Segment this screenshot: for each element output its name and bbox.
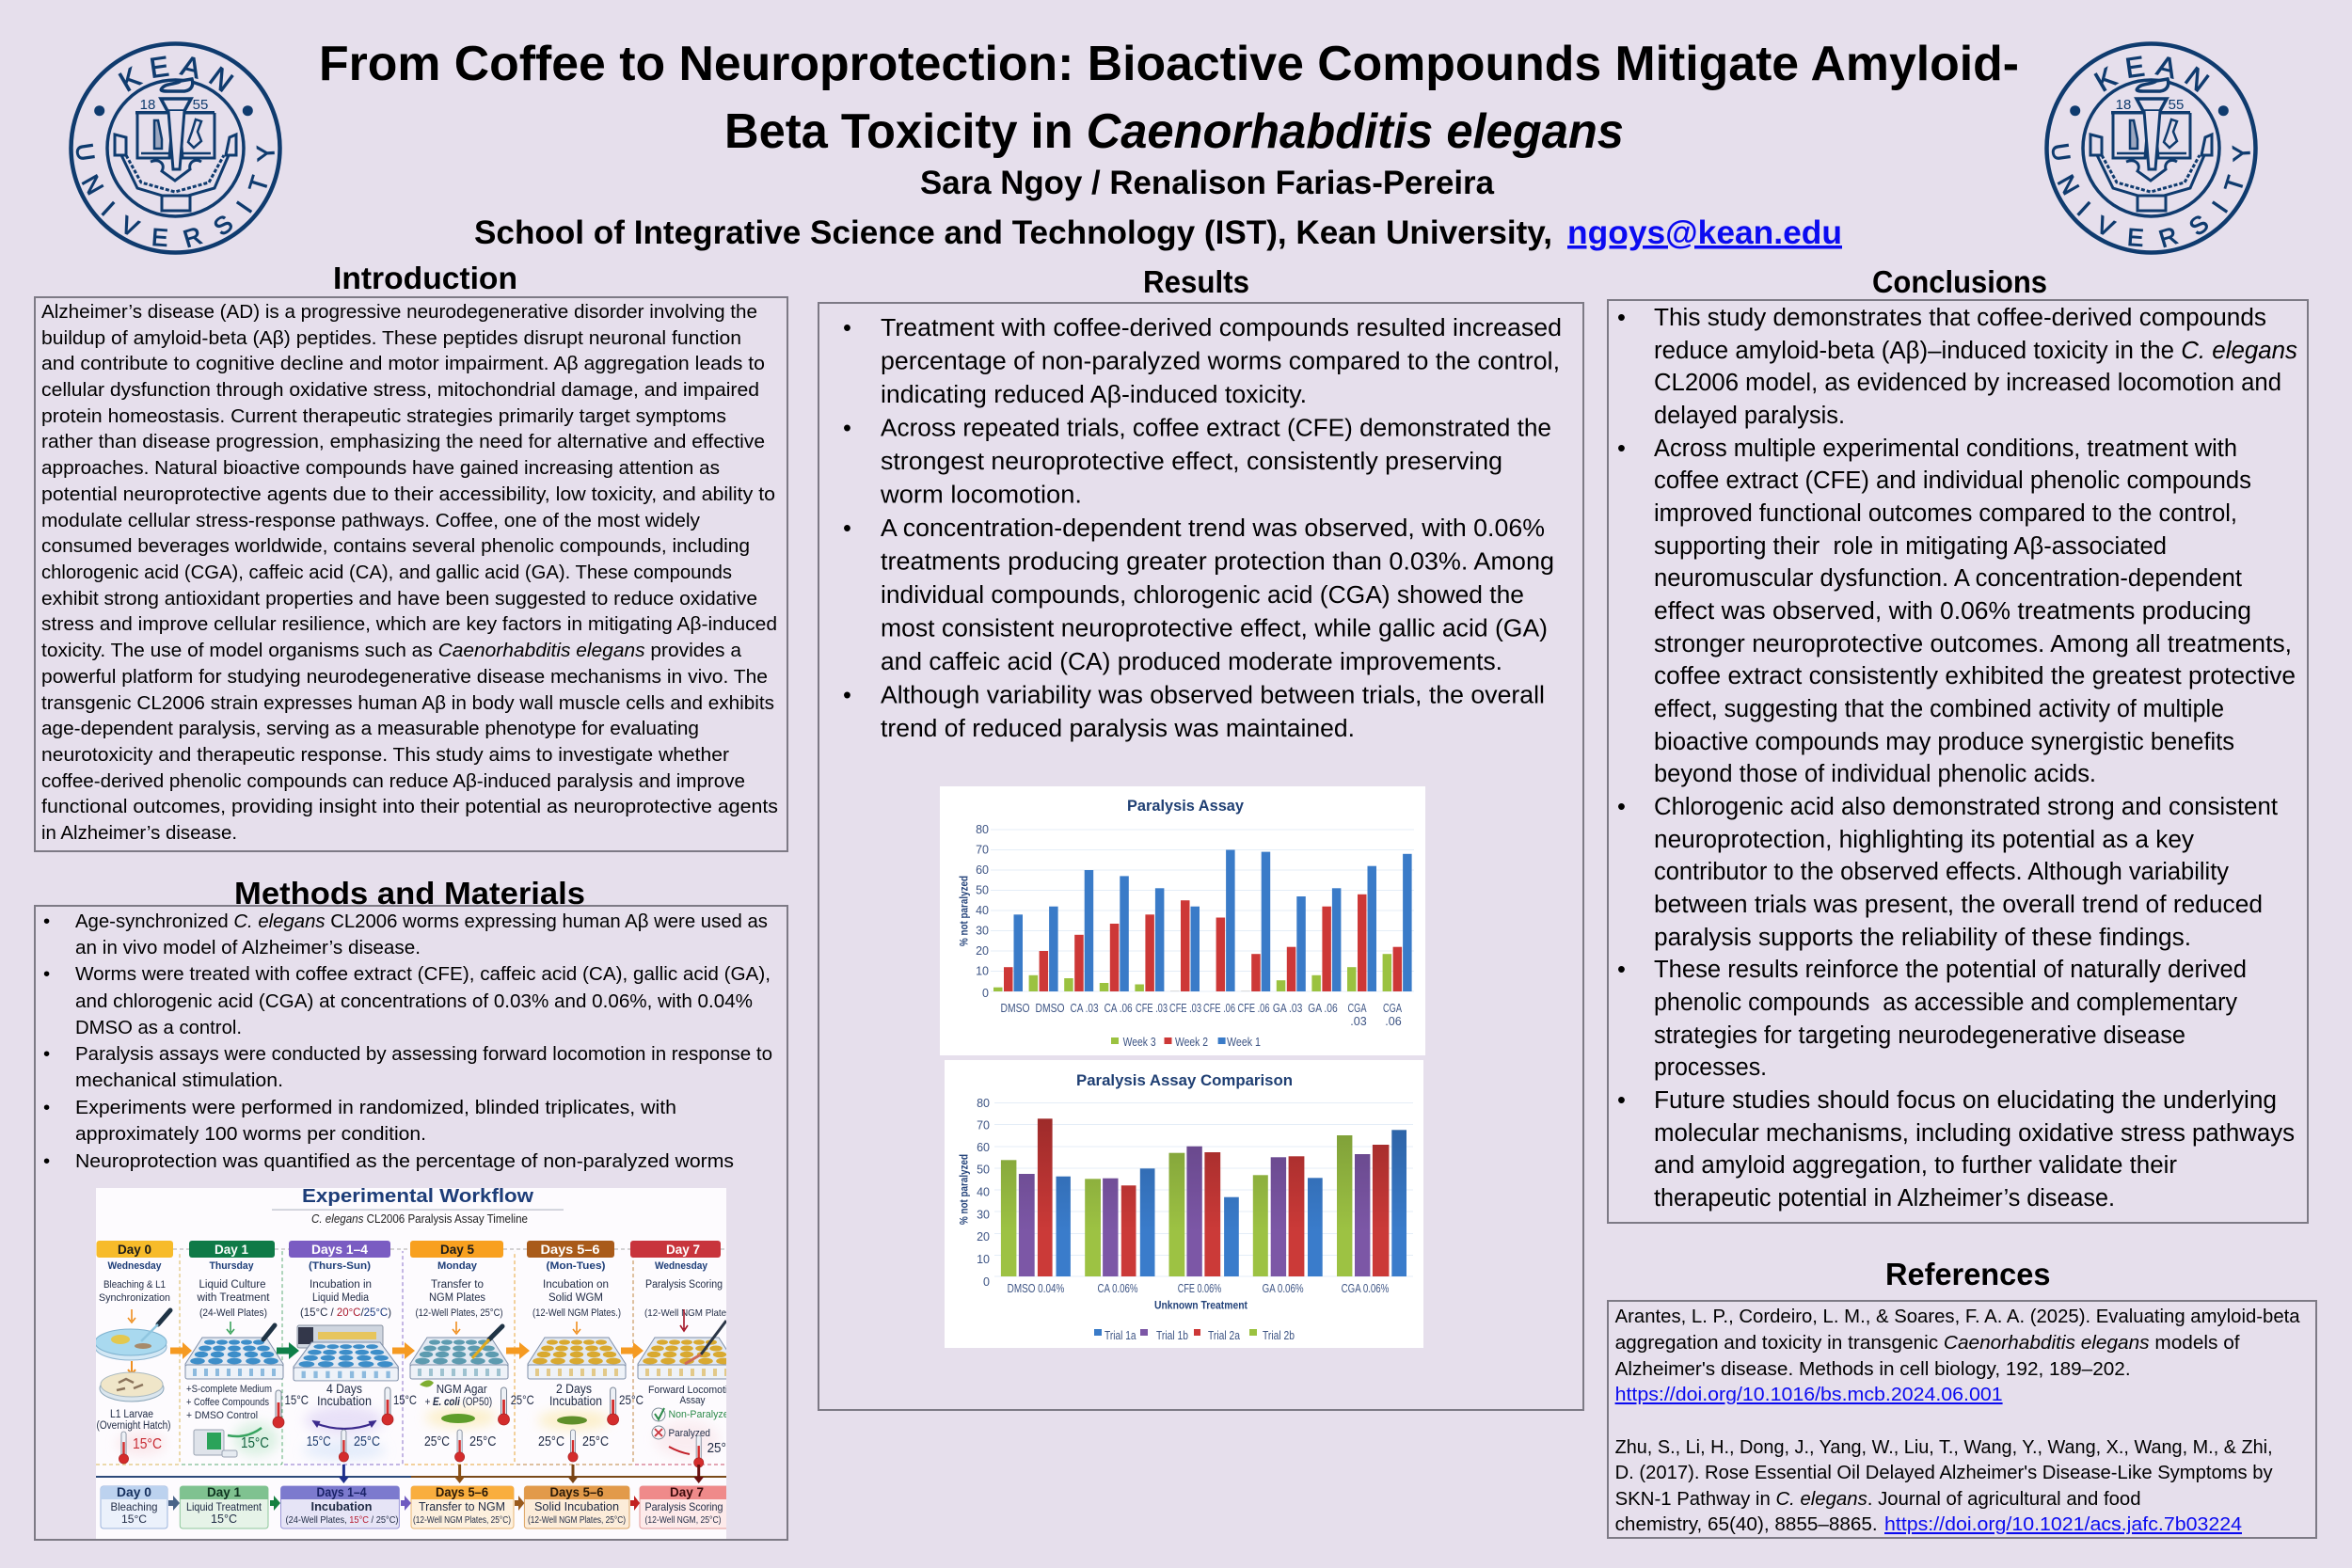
methods bullet list: • [43, 1097, 50, 1118]
panel: references: Arantes, L. P., Cordeiro, L. M., & Soares, F. A. A. (2025). Evaluating amyloid-beta [1615, 1306, 2300, 1327]
x axis labels: DMSO [1035, 1002, 1065, 1015]
panel: conclusions: bioactive compounds may produce synergistic benefits [1654, 729, 2234, 755]
legend: Trial 1b [1156, 1329, 1188, 1342]
y axis labels: 50 [976, 884, 989, 897]
step: Days 5-6: Days 5–6 [540, 1242, 600, 1257]
step: Day 5: 25°C [511, 1392, 534, 1407]
step: Days 5-6: (Mon-Tues) [546, 1260, 606, 1272]
panel: introduction: functional outcomes, providing insight into their potential as neuroprotective agents [41, 796, 778, 817]
legend: Trial 2a [1208, 1329, 1240, 1342]
y axis labels: 50 [977, 1163, 990, 1176]
panel: conclusions: paralysis supports the reliability of these findings. [1654, 925, 2191, 951]
summary card: Day 1: 15°C [211, 1512, 237, 1526]
y axis labels: 60 [977, 1141, 990, 1154]
step: Day 5: Day 5 [440, 1242, 474, 1257]
panel: conclusions: neuromuscular dysfunction. A concentration-dependent [1654, 565, 2242, 592]
step: Days 1-4 [284, 1241, 417, 1462]
summary card: Day 1 [180, 1484, 268, 1528]
x axis labels: CFE .03 [1169, 1002, 1201, 1015]
step: Day 1: (24-Well Plates) [199, 1307, 267, 1319]
bar chart: Paralysis Assay: % not paralyzed [960, 876, 971, 946]
results bullet list [843, 315, 1562, 742]
panel: conclusions: contributor to the observed effects. Although variability [1654, 859, 2229, 885]
x axis labels: CGA [1383, 1002, 1402, 1015]
step: Days 1-4: (15°C / 20°C/25°C) [300, 1306, 391, 1319]
step: Days 5-6: Incubation on [543, 1279, 609, 1291]
x axis labels: CA .03 [1071, 1002, 1099, 1015]
y axis labels: 40 [976, 904, 989, 917]
panel: conclusions: neuroprotection, highlighting its potential as a key [1654, 827, 2194, 853]
summary card: Days 1-4: Incubation [310, 1499, 373, 1513]
panel: conclusions: Chlorogenic acid also demonstrated strong and consistent [1654, 794, 2278, 820]
panel: references [1608, 1301, 2316, 1538]
summary card: Days 1-4 [280, 1484, 399, 1528]
summary card: Day 7 [640, 1484, 730, 1528]
small connecting arrows [168, 1496, 640, 1511]
results bullet list: worm locomotion. [880, 482, 1082, 508]
step: Day 7: Non-Paralyzed [668, 1409, 734, 1420]
panel: references: chemistry, 65(40), 8855–8865. [1615, 1513, 1878, 1535]
summary card: Days 1-4: Days 1–4 [316, 1484, 367, 1499]
panel: introduction: cellular dysfunction through oxidative stress, mitochondrial damage, and impaired [41, 379, 759, 401]
methods bullet list: an in vivo model of Alzheimer’s disease. [75, 937, 421, 958]
results bullet list: A concentration-dependent trend was observed, with 0.06% [881, 515, 1545, 542]
step: Day 5: 25°C [424, 1434, 450, 1449]
summary card: Day 7: Day 7 [670, 1484, 704, 1499]
panel: conclusions: • [1617, 794, 1626, 820]
panel: introduction: toxicity. The use of model organisms such as Caenorhabditis elegans provides a [41, 640, 742, 661]
legend [1094, 1329, 1295, 1342]
panel: conclusions: delayed paralysis. [1654, 403, 1845, 429]
legend: Trial 2b [1263, 1329, 1295, 1342]
legend: Week 2 [1175, 1036, 1208, 1049]
panel: conclusions: between trials was present, the overall trend of reduced [1654, 892, 2263, 918]
x axis labels: CGA 0.06% [1342, 1282, 1389, 1295]
y axis labels [977, 1097, 990, 1289]
step: Days 1-4: 25°C [354, 1434, 380, 1449]
summary card: Days 1-4: (24-Well Plates, 15°C / 25°C) [286, 1514, 399, 1526]
affiliation and email: School of Integrative Science and Technology (IST), Kean University, [474, 214, 1552, 251]
step: Days 1-4: Liquid Media [312, 1292, 370, 1304]
step: Day 7: Paralysis Scoring [645, 1279, 723, 1291]
bars trial 1b [1019, 1147, 1370, 1276]
x axis labels: GA .06 [1308, 1002, 1338, 1015]
heading: Introduction: Introduction [333, 261, 517, 295]
panel: conclusions: stronger neuroprotective outcomes. Among all treatments, [1654, 631, 2292, 657]
y axis labels: 10 [976, 965, 989, 978]
step: Days 1-4: 4 Days [326, 1381, 362, 1396]
title: Beta Toxicity in Caenorhabditis elegans [724, 104, 1624, 159]
methods bullet list: • [43, 1043, 50, 1065]
x axis labels: .06 [1385, 1015, 1402, 1028]
colour tints [117, 1405, 719, 1460]
step: Days 1-4: Incubation [317, 1394, 372, 1408]
y axis labels: 20 [976, 944, 989, 958]
step: Day 7: 25°C [707, 1441, 736, 1456]
panel: conclusions: CL2006 model, as evidenced by increased locomotion and [1654, 370, 2281, 396]
panel: references: Zhu, S., Li, H., Dong, J., Yang, W., Liu, T., Wang, Y., Wang, X., Wang, M., & Zhi, [1615, 1436, 2273, 1458]
panel: references: D. (2017). Rose Essential Oil Delayed Alzheimer's Disease-Like Symptoms by [1615, 1462, 2273, 1483]
x axis labels: CA 0.06% [1097, 1282, 1138, 1295]
y axis labels: 80 [977, 1097, 990, 1110]
panel: conclusions [1608, 300, 2308, 1223]
logo: Kean University seal, right [2044, 41, 2258, 255]
x axis labels: .03 [1350, 1015, 1367, 1028]
timeline bar with arrows [96, 1465, 726, 1483]
panel: conclusions: These results reinforce the potential of naturally derived [1654, 957, 2247, 983]
step: Day 0: 15°C [133, 1436, 162, 1452]
bar chart: Paralysis Assay Comparison: % not paralyzed [960, 1154, 971, 1225]
y axis labels: 0 [983, 1275, 990, 1289]
panel: conclusions: coffee extract consistently exhibited the greatest protective [1654, 663, 2296, 689]
methods bullet list: DMSO as a control. [75, 1017, 242, 1038]
large transition arrows [170, 1342, 644, 1359]
summary card: Days 5-6 incubation [524, 1484, 629, 1528]
step: Days 1-4: Days 1–4 [311, 1242, 368, 1257]
results bullet list: most consistent neuroprotective effect, while gallic acid (GA) [881, 615, 1548, 641]
panel: conclusions: • [1617, 436, 1626, 462]
panel: conclusions: improved functional outcomes compared to the control, [1654, 500, 2237, 527]
affiliation and email: ngoys@kean.edu [1567, 214, 1842, 251]
x axis labels: CFE .03 [1136, 1002, 1168, 1015]
y axis labels: 10 [977, 1253, 990, 1266]
panel: conclusions: effect was observed, with 0.06% treatments producing [1654, 598, 2251, 625]
step: Day 1: 15°C [241, 1435, 269, 1451]
panel: introduction: modulate cellular stress-response pathways. Coffee, one of the most widely [41, 510, 701, 531]
y axis labels [976, 823, 989, 1000]
summary card: Day 1: Liquid Treatment [186, 1500, 262, 1513]
step: Days 5-6: (12-Well NGM Plates.) [532, 1307, 621, 1319]
panel: conclusions: Future studies should focus on elucidating the underlying [1654, 1087, 2277, 1114]
panel: conclusions: strategies for targeting neurodegenerative disease [1654, 1022, 2185, 1049]
title: From Coffee to Neuroprotection: Bioactive Compounds Mitigate Amyloid- [319, 37, 2019, 91]
methods bullet list: • [43, 963, 50, 985]
step: Days 5-6: 25°C [538, 1434, 564, 1449]
summary card: Days 5-6 transfer: (12-Well NGM Plates, 25°C) [413, 1515, 511, 1526]
panel: conclusions: molecular mechanisms, including oxidative stress pathways [1654, 1120, 2295, 1147]
y axis labels: 40 [977, 1185, 990, 1198]
y axis labels: 70 [976, 843, 989, 856]
bar chart: Paralysis Assay [940, 786, 1425, 1055]
results bullet list: strongest neuroprotective effect, consistently preserving [881, 449, 1502, 475]
panel: conclusions: • [1617, 1087, 1626, 1114]
step: Days 5-6: Incubation [549, 1394, 602, 1408]
panel: conclusions: coffee extract (CFE) and individual phenolic compounds [1654, 467, 2251, 494]
step: Days 1-4: 15°C [307, 1434, 331, 1449]
step: Days 1-4: 15°C [284, 1392, 309, 1407]
logo: Kean University seal, right: UNIVERSITY [2051, 143, 2250, 248]
bar chart: Paralysis Assay Comparison [945, 1060, 1423, 1348]
step: Day 0: (Overnight Hatch) [96, 1420, 171, 1432]
workflow diagram: Experimental Workflow [95, 1186, 739, 1539]
panel: introduction: potential neuroprotective agents due to their accessibility, low toxicity, and ability to [41, 483, 775, 505]
y axis labels: 80 [976, 823, 989, 836]
step: Day 1: Day 1 [215, 1242, 248, 1257]
x axis labels [1008, 1282, 1389, 1295]
x axis labels: GA 0.06% [1263, 1282, 1304, 1295]
step: Day 0: Wednesday [107, 1260, 162, 1272]
step: Day 5: + E. coli (OP50) [425, 1397, 492, 1408]
step: Day 1: with Treatment [196, 1292, 270, 1304]
results bullet list: Treatment with coffee-derived compounds resulted increased [881, 315, 1562, 341]
methods bullet list: mechanical stimulation. [75, 1069, 283, 1091]
panel: introduction: powerful platform for studying neurodegenerative disease mechanisms in vivo. The [41, 666, 768, 688]
workflow title: Experimental Workflow [302, 1186, 533, 1207]
methods bullet list: • [43, 911, 50, 932]
bars week 1 [1014, 850, 1412, 991]
panel: introduction: and contribute to cognitive decline and motor impairment. Aβ aggregation leads to [41, 353, 765, 374]
legend [1111, 1036, 1261, 1049]
step: Day 1: Liquid Culture [199, 1279, 265, 1291]
summary card: Day 1: Day 1 [207, 1484, 241, 1499]
authors: Sara Ngoy / Renalison Farias-Pereira [920, 165, 1495, 201]
results bullet list: • [843, 515, 851, 542]
heading: Conclusions: Conclusions [1872, 264, 2047, 299]
results bullet list: indicating reduced Aβ-induced toxicity. [881, 382, 1307, 408]
panel: introduction: transgenic CL2006 strain expresses human Aβ in body wall muscle cells and exhibits [41, 692, 774, 714]
summary card: Days 5-6 incubation: Days 5–6 [549, 1484, 604, 1499]
summary card: Day 7: (12-Well NGM, 25°C) [645, 1514, 721, 1526]
step: Day 7: Paralyzed [668, 1428, 710, 1439]
step: Day 0 [95, 1241, 173, 1464]
results bullet list: • [843, 315, 851, 341]
y axis labels: 20 [977, 1230, 990, 1243]
panel: conclusions: supporting their role in mitigating Aβ-associated [1654, 533, 2167, 560]
x axis labels: CFE 0.06% [1178, 1282, 1221, 1295]
panel: references: aggregation and toxicity in transgenic Caenorhabditis elegans models of [1615, 1332, 2240, 1354]
step: Day 7: Wednesday [655, 1260, 708, 1272]
panel: references: SKN-1 Pathway in C. elegans. Journal of agricultural and food [1615, 1488, 2141, 1510]
step: Day 5: (12-Well Plates, 25°C) [416, 1307, 502, 1319]
summary card: Day 0: Day 0 [117, 1484, 151, 1499]
results bullet list: percentage of non-paralyzed worms compared to the control, [881, 348, 1560, 374]
panel: references: https://doi.org/10.1016/bs.mcb.2024.06.001 [1615, 1384, 2003, 1405]
legend: Week 1 [1227, 1036, 1261, 1049]
panel: introduction: chlorogenic acid (CGA), caffeic acid (CA), and gallic acid (GA). These compounds [41, 562, 732, 583]
dashed panel separators [96, 1249, 726, 1465]
summary card: Days 5-6 transfer: Transfer to NGM [419, 1499, 505, 1513]
step: Day 7: Assay [679, 1395, 706, 1406]
methods bullet list: and chlorogenic acid (CGA) at concentrations of 0.03% and 0.06%, with 0.04% [75, 990, 753, 1012]
panel: introduction: consumed beverages worldwide, contains several phenolic compounds, including [41, 535, 750, 557]
step: Day 0: Synchronization [99, 1292, 170, 1304]
panel: introduction: coffee-derived phenolic compounds can reduce Aβ-induced paralysis and improve [41, 770, 745, 792]
summary card: Days 5-6 transfer: Days 5–6 [436, 1484, 488, 1499]
step: Day 7: Forward Locomotion [648, 1385, 739, 1396]
methods bullet list: Experiments were performed in randomized, blinded triplicates, with [75, 1097, 676, 1118]
panel: introduction: stress and improve cellular resilience, which are key factors in mitigating Aβ-induced [41, 613, 777, 635]
results bullet list: • [843, 683, 851, 709]
panel: introduction: exhibit strong antioxidant properties and have been suggested to reduce oxidative [41, 588, 757, 610]
heading: Results: Results [1143, 264, 1249, 299]
heading: Methods and Materials: Methods and Materials [234, 876, 585, 911]
summary card: Day 0: 15°C [121, 1513, 147, 1526]
panel: conclusions: and amyloid aggregation, to further validate their [1654, 1152, 2178, 1179]
logo: Kean University seal, left: KEAN [119, 55, 234, 92]
methods bullet list: approximately 100 worms per condition. [75, 1123, 426, 1145]
panel: introduction: age-dependent paralysis, serving as a measurable phenotype for evaluating [41, 718, 699, 739]
bars week 2 [1004, 895, 1402, 991]
methods bullet list: • [43, 1150, 50, 1172]
step: Days 5-6: 25°C [582, 1434, 609, 1449]
logo: Kean University seal, left: 55 [193, 97, 208, 113]
bars trial 1a [1056, 1130, 1406, 1276]
x axis labels: CFE .06 [1203, 1002, 1235, 1015]
panel: conclusions: beyond those of individual phenolic acids. [1654, 761, 2096, 787]
step: Days 5-6: 25°C [619, 1392, 644, 1407]
summary card: Days 5-6 transfer [411, 1484, 514, 1528]
panel: introduction: buildup of amyloid-beta (Aβ) peptides. These peptides disrupt neuronal function [41, 327, 741, 349]
bar chart: Paralysis Assay: Paralysis Assay [1127, 797, 1245, 815]
step: Days 5-6 [527, 1241, 644, 1462]
summary card: Days 5-6 incubation: Solid Incubation [534, 1499, 619, 1513]
methods bullet list [43, 911, 772, 1172]
x axis labels: CGA [1347, 1002, 1367, 1015]
step: Days 1-4: 15°C [393, 1392, 417, 1407]
step: Day 7: Day 7 [666, 1242, 700, 1257]
step: Days 5-6: Solid WGM [548, 1292, 603, 1304]
results bullet list: and caffeic acid (CA) produced moderate improvements. [881, 649, 1502, 675]
y axis labels: 70 [977, 1119, 990, 1132]
logo: Kean University seal, right: 55 [2169, 97, 2184, 113]
summary card: Day 7: Paralysis Scoring [645, 1500, 723, 1513]
y axis labels: 30 [976, 924, 989, 937]
methods bullet list: Neuroprotection was quantified as the percentage of non-paralyzed worms [75, 1150, 734, 1172]
x axis labels: DMSO [1001, 1002, 1030, 1015]
step: Day 1: +S-complete Medium [186, 1384, 272, 1395]
summary card: Day 0 [101, 1484, 167, 1528]
title [319, 37, 2019, 159]
panel: introduction: approaches. Natural bioactive compounds have gained increasing attention as [41, 457, 720, 479]
results bullet list: • [843, 416, 851, 442]
panel: introduction: protein homeostasis. Current therapeutic strategies primarily target symptoms [41, 405, 726, 427]
panel: conclusions: Across multiple experimental conditions, treatment with [1654, 436, 2237, 462]
summary card: Day 0: Bleaching [111, 1500, 158, 1513]
panel: references: https://doi.org/10.1021/acs.jafc.7b03224 [1884, 1513, 2242, 1535]
step: Day 0: Day 0 [118, 1242, 151, 1257]
x axis labels: DMSO 0.04% [1008, 1282, 1064, 1295]
panel: references: Alzheimer's disease. Methods in cell biology, 192, 189–202. [1615, 1358, 2131, 1380]
step: Day 1: + Coffee Compounds [186, 1397, 269, 1408]
results bullet list: Although variability was observed between trials, the overall [881, 683, 1545, 709]
step: Day 1: Thursday [209, 1260, 254, 1272]
bars trial 2b [1001, 1135, 1352, 1276]
panel: conclusions: processes. [1654, 1054, 1767, 1081]
bars trial 2a [1038, 1118, 1389, 1276]
step: Day 5: Monday [437, 1260, 478, 1272]
heading: References: References [1885, 1257, 2051, 1291]
y axis labels: 0 [982, 987, 989, 1000]
results bullet list: Across repeated trials, coffee extract (CFE) demonstrated the [881, 416, 1551, 442]
panel: introduction: rather than disease progression, emphasizing the need for alternative and effective [41, 431, 765, 452]
panel: conclusions: • [1617, 957, 1626, 983]
panel: introduction [35, 297, 787, 851]
step: Day 7: (12-Well NGM Plates [644, 1307, 731, 1319]
y axis labels: 60 [976, 863, 989, 877]
step: Day 5: NGM Agar [437, 1383, 487, 1396]
workflow subtitle: C. elegans CL2006 Paralysis Assay Timeline [311, 1212, 528, 1226]
panel: results [818, 303, 1583, 1410]
step: Day 5: 25°C [469, 1434, 497, 1449]
step: Day 1: + DMSO Control [186, 1410, 258, 1421]
bars week 3 [993, 954, 1391, 991]
results bullet list: treatments producing greater protection than 0.03%. Among [881, 549, 1554, 576]
step: Day 0: L1 Larvae [110, 1409, 153, 1420]
panel: introduction: in Alzheimer’s disease. [41, 822, 237, 844]
panel: methods and materials [35, 906, 787, 1540]
logo: Kean University seal, left: UNIVERSITY [75, 143, 275, 248]
panel: conclusions: • [1617, 305, 1626, 331]
legend: Week 3 [1123, 1036, 1156, 1049]
legend: Trial 1a [1104, 1329, 1136, 1342]
panel: introduction: neurotoxicity and therapeutic response. This study aims to investigate whether [41, 744, 729, 766]
logo: Kean University seal, left: 18 [140, 97, 155, 113]
x axis labels [1001, 1002, 1402, 1028]
panel: conclusions: reduce amyloid-beta (Aβ)–induced toxicity in the C. elegans [1654, 338, 2297, 364]
panel: conclusions: effect, suggesting that the combined activity of multiple [1654, 696, 2224, 722]
panel: conclusions: This study demonstrates that coffee-derived compounds [1654, 305, 2266, 331]
panel: conclusions: therapeutic potential in Alzheimer’s disease. [1654, 1185, 2115, 1212]
x axis labels: GA .03 [1273, 1002, 1302, 1015]
logo: Kean University seal, right: KEAN [2094, 55, 2210, 92]
logo: Kean University seal, right: 18 [2116, 97, 2131, 113]
methods bullet list: Worms were treated with coffee extract (CFE), caffeic acid (CA), gallic acid (GA), [75, 963, 771, 985]
y axis labels: 30 [977, 1208, 990, 1221]
step: Day 5: NGM Plates [429, 1292, 485, 1304]
summary card: Days 5-6 incubation: (12-Well NGM Plates, 25°C) [528, 1515, 626, 1526]
step: Day 5: Transfer to [431, 1279, 484, 1291]
bar chart: Paralysis Assay Comparison: Unknown Treatment [1154, 1301, 1248, 1312]
panel: conclusions: phenolic compounds as accessible and complementary [1654, 990, 2237, 1016]
step: Day 0: Bleaching & L1 [103, 1279, 166, 1291]
bar chart: Paralysis Assay Comparison: Paralysis Assay Comparison [1076, 1071, 1293, 1089]
step: Day 1 [185, 1241, 284, 1457]
step: Day 5 [410, 1241, 534, 1462]
logo: Kean University seal, left [69, 41, 282, 255]
panel: introduction: Alzheimer’s disease (AD) is a progressive neurodegenerative disorder involving the [41, 301, 757, 323]
methods bullet list: Paralysis assays were conducted by assessing forward locomotion in response to [75, 1043, 772, 1065]
step: Days 1-4: (Thurs-Sun) [309, 1260, 371, 1272]
step: Days 1-4: Incubation in [310, 1279, 372, 1291]
x axis labels: CA .06 [1104, 1002, 1133, 1015]
step: Days 5-6: 2 Days [556, 1381, 592, 1396]
step: Day 7 [630, 1241, 726, 1467]
x axis labels: CFE .06 [1238, 1002, 1270, 1015]
methods bullet list: Age-synchronized C. elegans CL2006 worms expressing human Aβ were used as [75, 911, 768, 932]
results bullet list: trend of reduced paralysis was maintained. [881, 716, 1355, 742]
results bullet list: individual compounds, chlorogenic acid (CGA) showed the [881, 582, 1524, 609]
